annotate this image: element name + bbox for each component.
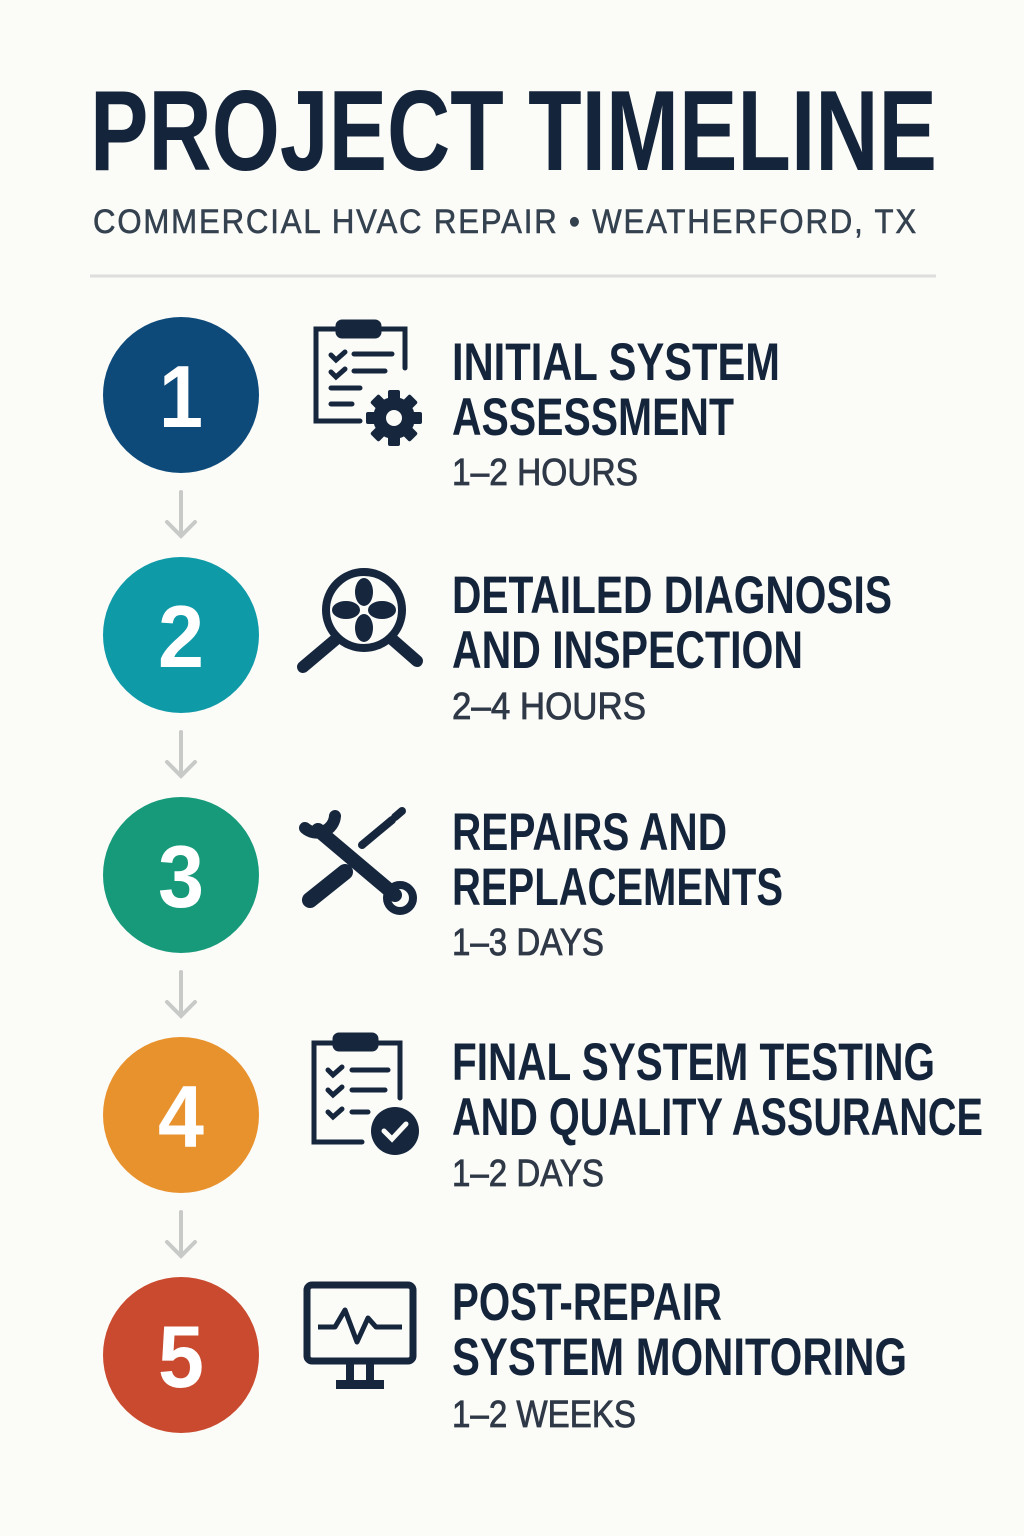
arrow 4	[167, 1212, 195, 1256]
arrow 1	[167, 492, 195, 536]
circle 1	[103, 317, 259, 473]
circle 2: 2	[158, 587, 204, 686]
text 5: 1–2 WEEKS	[452, 1394, 636, 1436]
step 5	[103, 1273, 907, 1436]
step 3	[103, 797, 783, 964]
circle 3: 3	[158, 827, 204, 926]
circle 5	[103, 1277, 259, 1433]
circle 4	[103, 1037, 259, 1193]
text 2: DETAILED DIAGNOSIS	[452, 566, 892, 625]
text 5: SYSTEM MONITORING	[452, 1328, 907, 1387]
text 2: AND INSPECTION	[452, 621, 803, 680]
circle 4: 4	[158, 1067, 204, 1166]
text 5	[452, 1273, 907, 1436]
text 3: REPAIRS AND	[452, 803, 727, 862]
text 2	[452, 566, 892, 728]
step 1	[103, 317, 780, 494]
text 1: ASSESSMENT	[452, 388, 734, 447]
text 2: 2–4 HOURS	[452, 686, 646, 728]
text 1: 1–2 HOURS	[452, 452, 638, 494]
step 2	[103, 557, 892, 728]
text 3: 1–3 DAYS	[452, 922, 604, 964]
circle 3	[103, 797, 259, 953]
icon: fan magnifier	[303, 572, 417, 667]
text 1: INITIAL SYSTEM	[452, 333, 780, 392]
icon: clipboard with gear	[316, 322, 422, 446]
arrow 2	[167, 732, 195, 776]
icon: wrench and screwdriver	[305, 811, 413, 911]
text 4: 1–2 DAYS	[452, 1153, 604, 1195]
circle 1: 1	[159, 347, 203, 446]
icon: monitor with pulse	[307, 1285, 413, 1389]
text 5: POST-REPAIR	[452, 1273, 722, 1332]
circle 2	[103, 557, 259, 713]
text 3	[452, 803, 783, 964]
text 3: REPLACEMENTS	[452, 858, 783, 917]
circle 5: 5	[158, 1307, 204, 1406]
text 4	[452, 1033, 983, 1195]
icon: clipboard check	[314, 1035, 419, 1155]
arrow 3	[167, 972, 195, 1016]
text 1	[452, 333, 780, 494]
subtitle: COMMERCIAL HVAC REPAIR • WEATHERFORD, TX	[93, 203, 918, 241]
step 4	[103, 1033, 983, 1195]
